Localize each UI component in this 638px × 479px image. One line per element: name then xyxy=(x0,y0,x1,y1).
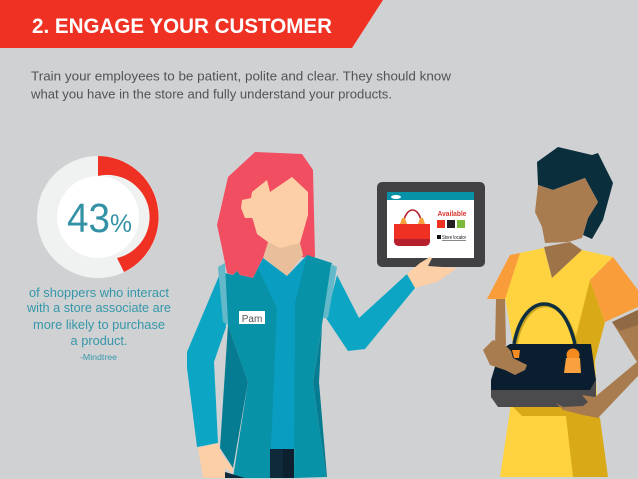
right arm and hand under bag xyxy=(556,310,638,418)
neck xyxy=(544,242,582,278)
name tag xyxy=(239,311,265,325)
intro text: Train your employees to be patient, polite and clear. They should know xyxy=(31,68,452,84)
name tag: Pam xyxy=(242,314,262,325)
vest right shadow xyxy=(313,325,327,477)
source: -Mindtree xyxy=(80,353,118,362)
right arm xyxy=(326,274,415,351)
tablet xyxy=(377,182,485,267)
tag under hand xyxy=(512,350,520,358)
bag handle xyxy=(516,306,576,346)
statistic caption: more likely to purchase xyxy=(33,318,165,332)
vest left xyxy=(225,268,277,478)
intro text: what you have in the store and fully understand your products. xyxy=(30,86,392,102)
arm shadow xyxy=(612,310,638,331)
figure: store associate xyxy=(187,152,415,478)
bag bottom xyxy=(491,380,596,407)
statistic caption: of shoppers who interact xyxy=(29,286,170,300)
intro text xyxy=(30,68,452,102)
title banner: 2. ENGAGE YOUR CUSTOMER xyxy=(32,15,332,38)
shoulder trim right xyxy=(323,264,337,318)
dress shadow xyxy=(513,280,608,477)
store locator: Store locator xyxy=(442,235,466,241)
statistic caption: with a store associate are xyxy=(26,301,171,315)
donut chart: 43%: 43 xyxy=(67,195,110,241)
shoulder trim left xyxy=(218,263,228,325)
vest right xyxy=(294,255,332,478)
hair xyxy=(537,147,613,239)
face xyxy=(241,177,308,248)
sleeve right xyxy=(590,257,638,322)
face xyxy=(535,178,598,243)
trousers at hip xyxy=(225,472,245,478)
handbag on screen xyxy=(394,210,430,246)
left arm xyxy=(495,299,506,345)
associate's hand holding tablet xyxy=(407,257,457,288)
left arm xyxy=(187,264,226,447)
sleeve left xyxy=(487,253,520,299)
hand on hip xyxy=(198,443,233,478)
figure: customer xyxy=(483,147,638,477)
statistic caption xyxy=(26,286,171,348)
dress xyxy=(500,248,613,477)
vest left shadow xyxy=(220,325,248,468)
shirt xyxy=(258,255,307,449)
trousers xyxy=(270,449,294,478)
bag body xyxy=(491,344,596,390)
handbag xyxy=(491,304,596,407)
donut chart: 43% xyxy=(37,156,159,278)
donut chart: 43%: % xyxy=(110,210,132,238)
statistic caption: a product. xyxy=(70,334,128,348)
hair xyxy=(217,152,315,278)
neck xyxy=(263,242,303,276)
colour swatches xyxy=(437,220,465,228)
title banner xyxy=(0,0,383,48)
availability label: Available xyxy=(438,209,466,218)
lock xyxy=(566,348,580,362)
hand on bag xyxy=(483,340,527,375)
